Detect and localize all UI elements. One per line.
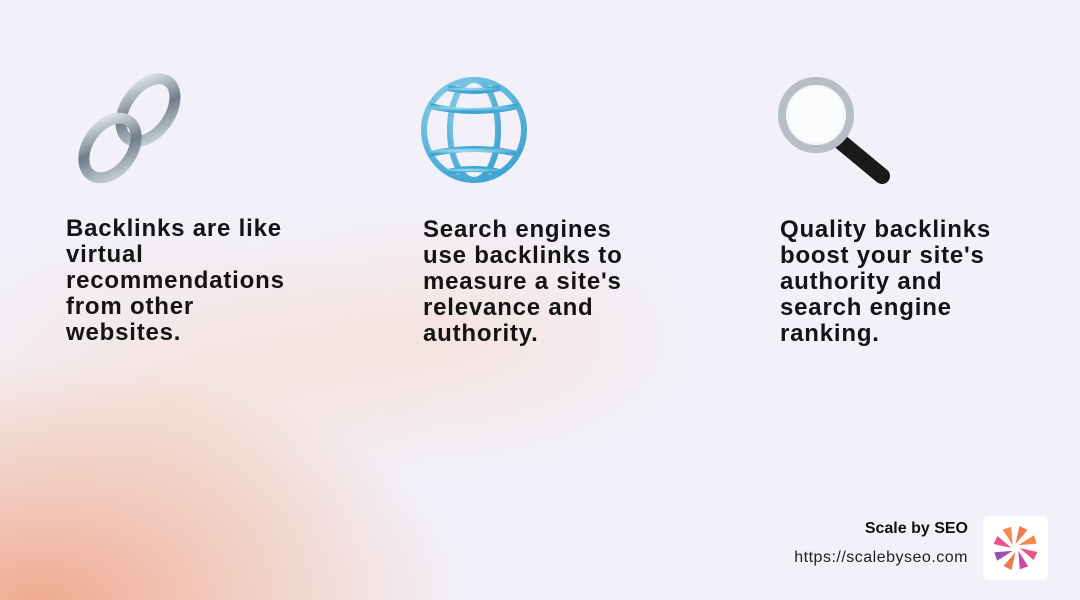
text: column 1: Backlinks are like virtual recommendations from other websites.	[66, 215, 285, 346]
icon: chain links	[78, 73, 180, 184]
brand name: Scale by SEO	[865, 520, 968, 537]
icon: globe	[421, 77, 527, 183]
logo	[983, 516, 1048, 580]
icon: magnifying glass	[778, 77, 890, 184]
text: column 2: Search engines use backlinks to measure a site's relevance and authority.	[423, 216, 623, 347]
text: column 3: Quality backlinks boost your site's authority and search engine ranking.	[780, 216, 991, 347]
brand url: https://scalebyseo.com	[794, 549, 968, 566]
